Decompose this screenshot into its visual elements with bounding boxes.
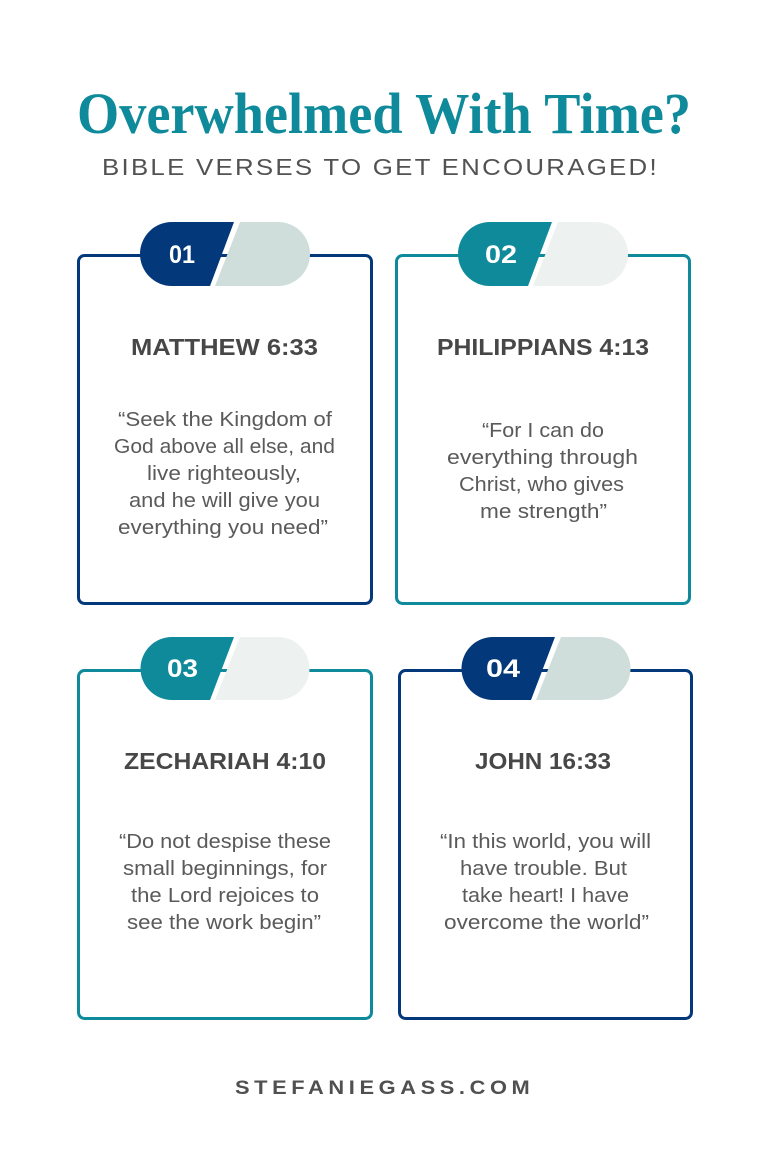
- verse: “For I can do: [482, 420, 604, 442]
- verse: “In this world, you will: [440, 831, 651, 853]
- verse: “Seek the Kingdom of: [118, 409, 332, 431]
- card border 2: [396, 256, 690, 604]
- verse: and he will give you: [129, 490, 320, 512]
- badge 01: [140, 222, 310, 286]
- verse: everything you need”: [118, 517, 328, 539]
- badge 04: 04: [486, 655, 520, 683]
- verse: Christ, who gives: [459, 474, 624, 496]
- verse: everything through: [447, 447, 638, 469]
- verse: [114, 409, 335, 539]
- badge 02: [458, 222, 628, 286]
- verse: overcome the world”: [444, 912, 649, 934]
- verse: [447, 420, 638, 523]
- badge 02: 02: [485, 241, 517, 269]
- card border 4: [400, 670, 692, 1018]
- verse: God above all else, and: [114, 436, 335, 458]
- panel: Matthew 6:33: [78, 222, 372, 604]
- panel: Philippians 4:13: [396, 222, 690, 604]
- footer website: STEFANIEGASS.COM: [235, 1077, 534, 1099]
- verse: have trouble. But: [460, 858, 627, 880]
- panel: John 16:33: [400, 637, 692, 1018]
- card border 3: [78, 670, 372, 1018]
- verse: the Lord rejoices to: [131, 885, 319, 907]
- verse: small beginnings, for: [123, 858, 327, 880]
- subtitle: BIBLE VERSES TO GET ENCOURAGED!: [102, 155, 659, 181]
- verse: [440, 831, 651, 934]
- verse: live righteously,: [147, 463, 301, 485]
- badge 03: [140, 637, 310, 700]
- verse: see the work begin”: [127, 912, 321, 934]
- verse: “Do not despise these: [119, 831, 331, 853]
- panel: Zechariah 4:10: [78, 637, 372, 1018]
- verse: me strength”: [480, 501, 607, 523]
- verse: [119, 831, 331, 934]
- heading: JOHN 16:33: [475, 748, 611, 774]
- badge 01: 01: [169, 241, 195, 269]
- heading: MATTHEW 6:33: [131, 334, 318, 360]
- heading: ZECHARIAH 4:10: [124, 748, 326, 774]
- verse: take heart! I have: [462, 885, 629, 907]
- title: Overwhelmed With Time?: [77, 81, 691, 146]
- heading: PHILIPPIANS 4:13: [437, 334, 649, 360]
- card border 1: [78, 256, 372, 604]
- badge 03: 03: [167, 655, 198, 683]
- badge 04: [462, 637, 631, 700]
